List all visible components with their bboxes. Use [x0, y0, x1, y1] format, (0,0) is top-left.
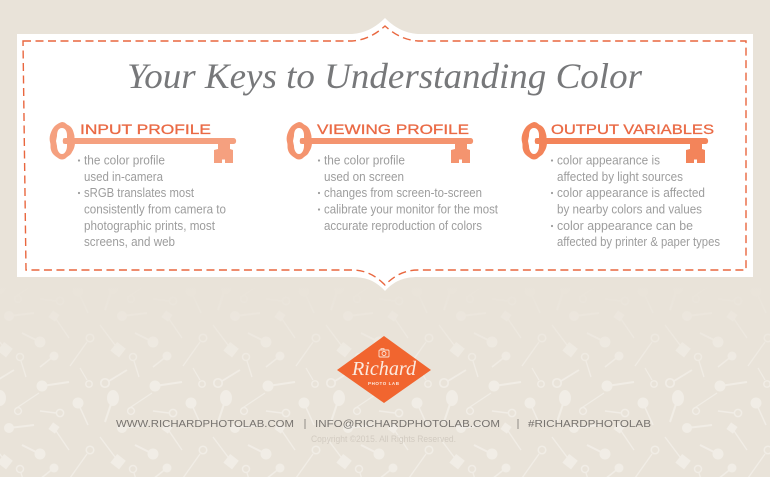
text block: output variables bullets: color appearance can be [557, 219, 693, 233]
column: output variables [522, 121, 720, 249]
logo wordmark: Richard [351, 358, 417, 380]
icon: key 3 [522, 122, 708, 163]
text block: viewing profile bullets [318, 154, 498, 233]
logo: Richard Photo Lab [337, 336, 431, 403]
text block: viewing profile bullets: used on screen [324, 170, 404, 184]
footer contact line: #RICHARDPHOTOLAB [528, 419, 651, 430]
text block: output variables bullets: affected by light sources [557, 170, 683, 184]
text block: viewing profile bullets: changes from screen-to-screen [324, 186, 482, 200]
text block: output variables bullets: color appearance is affected [557, 186, 705, 200]
heading: input profile: INPUT PROFILE [80, 121, 211, 137]
text block: output variables bullets: color appearance is [557, 154, 660, 168]
icon: key 2 [287, 122, 473, 163]
text block: input profile bullets: screens, and web [84, 235, 175, 249]
white panel [17, 18, 753, 291]
text block: input profile bullets: photographic prints, most [84, 219, 215, 233]
footer contact line: INFO@RICHARDPHOTOLAB.COM [315, 419, 500, 430]
copyright: Copyright ©2015. All Rights Reserved. [311, 434, 456, 444]
icon: key 1 [50, 122, 236, 163]
text block: viewing profile bullets: the color profile [324, 154, 405, 168]
background key pattern [0, 285, 770, 477]
text block: input profile bullets: consistently from camera to [84, 202, 226, 216]
heading: viewing profile: VIEWING PROFILE [317, 121, 469, 137]
logo subtitle: PHOTO LAB [368, 381, 400, 386]
column: viewing profile [287, 121, 498, 233]
footer contact line [116, 419, 651, 430]
text block: input profile bullets: used in-camera [84, 170, 163, 184]
title: Your Keys to Understanding Color [127, 56, 643, 96]
heading: output variables: OUTPUT VARIABLES [551, 121, 714, 137]
dashed border [23, 26, 746, 285]
text block: input profile bullets: sRGB translates most [84, 186, 194, 200]
footer contact line: WWW.RICHARDPHOTOLAB.COM [116, 419, 294, 430]
icon: camera [379, 349, 389, 357]
text block: input profile bullets: the color profile [84, 154, 165, 168]
text block: output variables bullets: affected by printer & paper types [557, 235, 720, 249]
text block: viewing profile bullets: calibrate your monitor for the most [324, 202, 498, 216]
text block: viewing profile bullets: accurate reproduction of colors [324, 219, 482, 233]
text block: input profile bullets [78, 154, 226, 249]
text block: output variables bullets: by nearby colors and values [557, 202, 702, 216]
column: input profile [50, 121, 236, 249]
text block: output variables bullets [551, 154, 720, 249]
